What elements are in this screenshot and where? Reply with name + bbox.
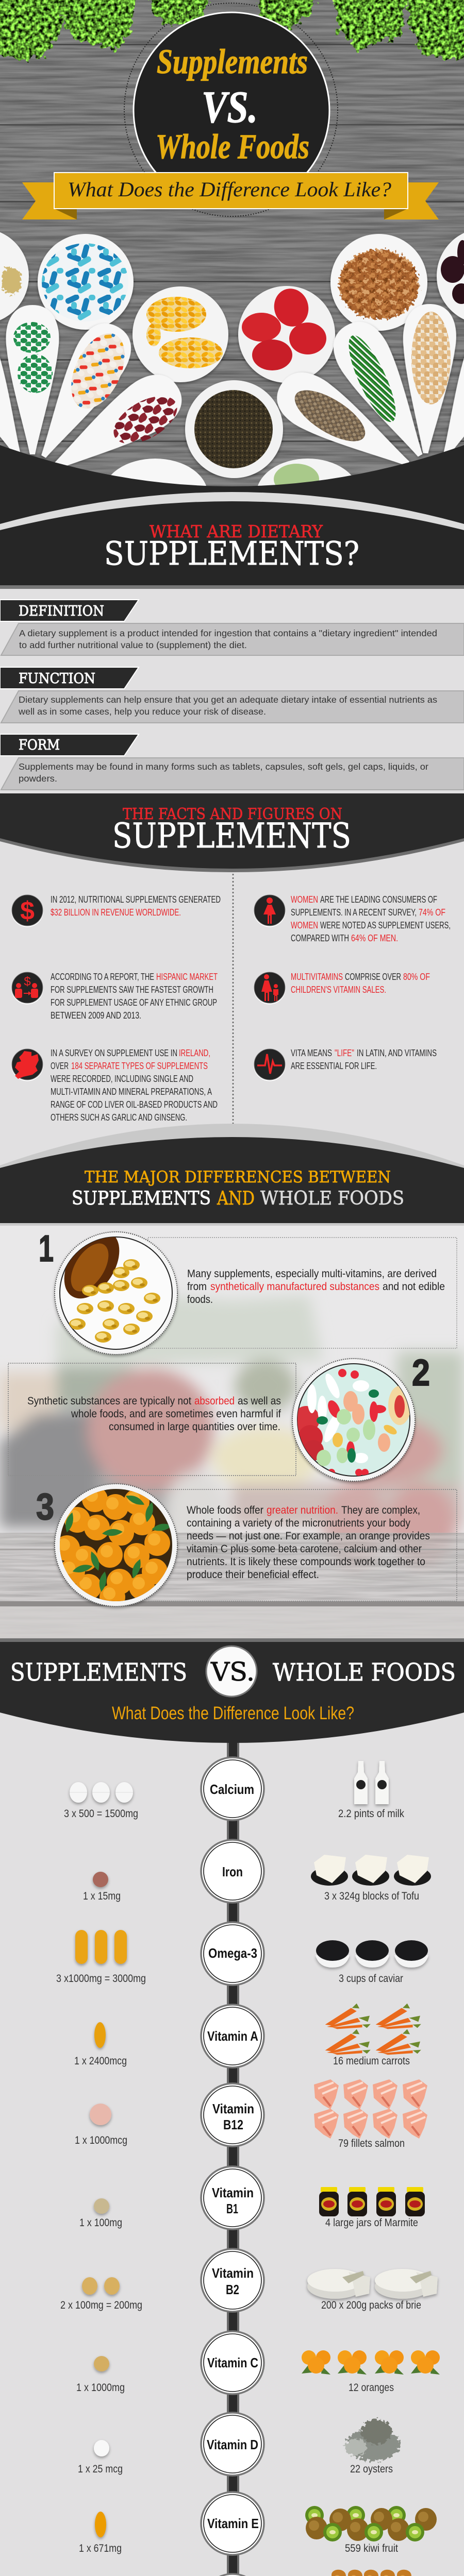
row: vitamin B2: 200 x 200g packs of brie [321,2299,421,2311]
row: vitamin B2: B2 [226,2282,239,2297]
icon: people exchanging money: $ [24,975,31,989]
icon: mother and child [254,972,286,1005]
difference 3: nutrients. It is likely these compounds work together to [187,1555,425,1568]
fact: multivitamins: 80% OF [403,971,430,982]
panel: definition: A dietary supplement is a product intended for ingestion that contains a "dietary ingredient" intended [19,628,437,638]
row: vitamin B1: Vitamin [212,2185,254,2200]
icon: dollar sign: $ [20,896,35,925]
icon: caviar bowls [316,1940,428,1968]
panel: definition: to add further nutritional value to (supplement) the diet. [19,640,247,650]
row: vitamin B2: Vitamin [212,2265,254,2281]
left heading: SUPPLEMENTS [10,1658,187,1687]
difference 3 [36,1484,457,1610]
panel: definition [0,600,464,655]
row: iron: 3 x 324g blocks of Tofu [324,1890,419,1902]
fact: revenue: $32 BILLION IN REVENUE WORLDWIDE. [51,907,181,918]
difference 1: from [187,1280,207,1293]
row: vitamin D: 22 oysters [350,2463,393,2475]
row: iron: Iron [222,1864,243,1879]
row: vitamin B12: Vitamin [212,2101,254,2116]
difference 3: Whole foods offer [187,1504,263,1516]
row: vitamin D: 1 x 25 mcg [78,2463,123,2475]
icon: heartbeat line [254,1049,286,1081]
heading large: SUPPLEMENTS [112,816,351,856]
icon: map of Ireland [11,1049,43,1081]
difference 1: foods. [187,1293,213,1306]
heading line 2: SUPPLEMENTS [72,1188,211,1209]
row: calcium: 2.2 pints of milk [338,1808,404,1820]
title line 1: Supplements [157,42,308,81]
row: calcium: 3 x 500 = 1500mg [64,1808,138,1820]
row: vitamin B12: B12 [223,2117,243,2132]
row: protein [49,2570,411,2576]
row: calcium [64,1757,404,1820]
icon: two milk bottles [354,1761,389,1804]
fact: hispanic market: ACCORDING TO A REPORT, THE [51,971,154,982]
panel: form: Supplements may be found in many forms such as tablets, capsules, soft gels, gel caps, liquids, or [19,761,428,772]
row: vitamin B2 [60,2249,438,2312]
heading small: THE FACTS AND FIGURES ON [123,805,342,823]
icon: pink tablet [90,2104,111,2125]
fact: multivitamins: COMPRISE OVER [345,971,401,982]
difference 1: and not edible [383,1280,445,1293]
row: vitamin B12 [75,2079,427,2149]
dark header: major differences [0,1124,464,1226]
subheading: What Does the Difference Look Like? [112,1703,354,1723]
heading large: SUPPLEMENTS? [104,535,359,572]
fact: hispanic market: FOR SUPPLEMENT USAGE OF ANY ETHNIC GROUP [51,997,217,1008]
fact: women: COMPARED WITH [291,933,349,943]
row: vitamin B1: B1 [226,2201,238,2216]
panel: function [0,667,464,723]
fact: revenue [11,894,221,927]
row: vitamin D: Vitamin D [207,2437,258,2452]
fact: ireland survey: MULTI-VITAMIN AND MINERAL PREPARATIONS, A [51,1086,212,1097]
row: vitamin B2: 2 x 100mg = 200mg [60,2299,142,2311]
number 3: 3 [36,1486,54,1528]
icon: chicken legs [332,2570,411,2576]
row: vitamin E [79,2492,437,2555]
icon: tablet [94,2356,109,2371]
row: vitamin B12: 79 fillets salmon [338,2138,405,2149]
number 1: 1 [39,1228,54,1269]
icon: marmite jars [319,2187,425,2216]
row: vitamin C: Vitamin C [207,2355,258,2370]
fact: multivitamins [254,971,430,1005]
dark header: supplements vs whole foods [0,1638,464,1743]
panel: major differences background [0,1226,464,1642]
heading line 1: THE MAJOR DIFFERENCES BETWEEN [85,1168,391,1187]
fact: ireland survey [11,1047,218,1123]
row: iron: 1 x 15mg [83,1890,121,1902]
row: vitamin E: Vitamin E [207,2516,259,2531]
panel: form [0,734,464,790]
icon: woman [254,895,286,927]
VS badge [206,1646,257,1697]
fact: hispanic market: HISPANIC MARKET [156,971,218,982]
title line 3: Whole Foods [156,127,309,166]
row: vitamin E: 559 kiwi fruit [345,2543,398,2554]
row: vitamin A [74,2004,421,2067]
icon: dollar sign [11,895,43,927]
difference 1: synthetically manufactured substances [210,1280,379,1293]
ribbon banner: What Does the Difference Look Like? [68,178,391,201]
row: vitamin B1: 1 x 100mg [79,2217,122,2229]
fact: ireland survey: OTHERS SUCH AS GARLIC AND GINSENG. [51,1112,187,1123]
fact: revenue: IN 2012, NUTRITIONAL SUPPLEMENTS GENERATED [51,894,221,905]
difference 2: as well as [238,1395,281,1407]
row: omega-3 [56,1922,428,1985]
fact: ireland survey: WERE RECORDED, INCLUDING SINGLE AND [51,1073,193,1084]
row: omega-3: 3 cups of caviar [339,1973,403,1985]
title line 2: VS. [202,82,258,132]
fact: ireland survey: IRELAND, [179,1047,210,1058]
difference 2: Synthetic substances are typically not [27,1395,191,1407]
heading small: WHAT ARE DIETARY [150,521,323,541]
difference 2: consumed in large quantities over time. [109,1420,280,1433]
row: vitamin A: 1 x 2400mcg [74,2055,127,2067]
fact: vita means life [254,1047,437,1081]
fact: ireland survey: IN A SURVEY ON SUPPLEMENT USE IN [51,1047,177,1058]
fact: ireland survey: RANGE OF COD LIVER OIL-BASED PRODUCTS AND [51,1099,218,1110]
ribbon banner [22,173,439,219]
fact: ireland survey: 184 SEPARATE TYPES OF SUPPLEMENTS [71,1060,208,1071]
fact: hispanic market: BETWEEN 2009 AND 2013. [51,1010,141,1021]
icon: salmon fillets [314,2079,427,2139]
hero panel: wooden table with title [0,0,464,531]
dark header: what are dietary supplements [0,445,464,589]
difference 3: produce their beneficial effect. [187,1568,319,1581]
difference 1: Many supplements, especially multi-vitamins, are derived [187,1267,437,1280]
icon: white tablet [94,2440,109,2456]
fact: women [254,894,451,943]
icon: tablet [94,2198,109,2214]
icon: kiwi fruit [305,2506,437,2541]
row: vitamin A: Vitamin A [207,2028,258,2044]
row: vitamin C [76,2331,440,2394]
dark header: facts and figures [0,793,464,872]
panel: form: FORM [19,737,60,753]
spoons with tablets, pills, beans, chives, seeds and chickpeas [0,303,464,531]
heading line 2 [72,1188,404,1209]
heading line 2: WHOLE FOODS [260,1188,404,1209]
fact: multivitamins: MULTIVITAMINS [291,971,343,982]
fact: hispanic market: FOR SUPPLEMENTS SAW THE FASTEST GROWTH [51,984,213,995]
heading line 2: AND [217,1188,255,1209]
VS badge: VS. [210,1657,255,1687]
row: omega-3: Omega-3 [208,1945,257,1961]
icon: three amber capsules [75,1930,127,1964]
difference 1 [39,1222,457,1354]
difference 2: whole foods, and are sometimes even harmful if [71,1408,281,1420]
panel: function: well as in some cases, help you reduce your risk of disease. [18,706,266,717]
icon: tofu blocks [311,1855,431,1886]
row: calcium: Calcium [210,1782,254,1797]
round plates with capsules, softgels, tomatoes and walnuts [0,228,464,383]
fact: vita means life: "LIFE" [335,1047,354,1058]
row: vitamin A: 16 medium carrots [333,2055,410,2067]
fact: women: WOMEN [291,920,318,930]
photo: oranges with leaves [54,1484,177,1610]
row: vitamin E: 1 x 671mg [79,2543,122,2554]
row: vitamin C: 12 oranges [349,2382,394,2394]
panel: function: FUNCTION [19,671,95,687]
icon: softgel [94,2022,106,2048]
icon: oysters [344,2419,400,2461]
row: iron [83,1840,431,1903]
icon: carrots [325,2004,421,2055]
fact: women: 74% OF [419,907,445,918]
fact: hispanic market [11,971,218,1021]
difference 2: absorbed [194,1395,235,1407]
row: omega-3: 3 x1000mg = 3000mg [56,1973,146,1985]
row: vitamin B12: 1 x 1000mcg [75,2134,127,2146]
panel: form: powders. [19,773,57,784]
photo: colourful pills [292,1359,415,1481]
fact: vita means life: IN LATIN, AND VITAMINS [357,1047,437,1058]
difference 3: containing a variety of the micronutrients your body [187,1517,410,1529]
photo: softgels spilling from a bottle [53,1222,177,1354]
icon: people exchanging money [11,972,43,1005]
row: vitamin B1: 4 large jars of Marmite [325,2217,418,2229]
fact: women: WOMEN [291,894,318,905]
difference 2 [8,1352,430,1481]
herbs along the top [0,0,464,61]
difference 3: vitamin C plus some beta carotene, calcium and other [187,1543,422,1555]
row: vitamin C: 1 x 1000mg [76,2382,125,2394]
icon: brie wheels [307,2269,438,2299]
icon: two tablets [82,2277,120,2295]
icon: oranges [302,2350,440,2375]
row: vitamin D [78,2413,400,2476]
icon: softgel [95,2512,106,2537]
icon: iron tablet [93,1872,108,1887]
fact: women: 64% OF MEN. [351,933,398,943]
fact: ireland survey: OVER [51,1060,69,1071]
panel: function: Dietary supplements can help ensure that you get an adequate dietary intake of essential nutrients as [19,694,437,705]
fact: vita means life: ARE ESSENTIAL FOR LIFE. [291,1060,377,1071]
fact: multivitamins: CHILDREN'S VITAMIN SALES. [291,984,386,995]
comparison timeline bar [227,1741,239,2576]
difference 3: They are complex, [341,1504,420,1516]
title badge [124,3,338,216]
fact: vita means life: VITA MEANS [291,1047,332,1058]
icon: three white tablets [70,1782,133,1803]
difference 3: needs — not just one. For example, an orange provides [187,1530,430,1542]
panel: definition: DEFINITION [19,603,104,619]
row: vitamin B1 [79,2166,425,2229]
number 2: 2 [412,1352,430,1394]
difference 3: greater nutrition. [267,1504,338,1516]
